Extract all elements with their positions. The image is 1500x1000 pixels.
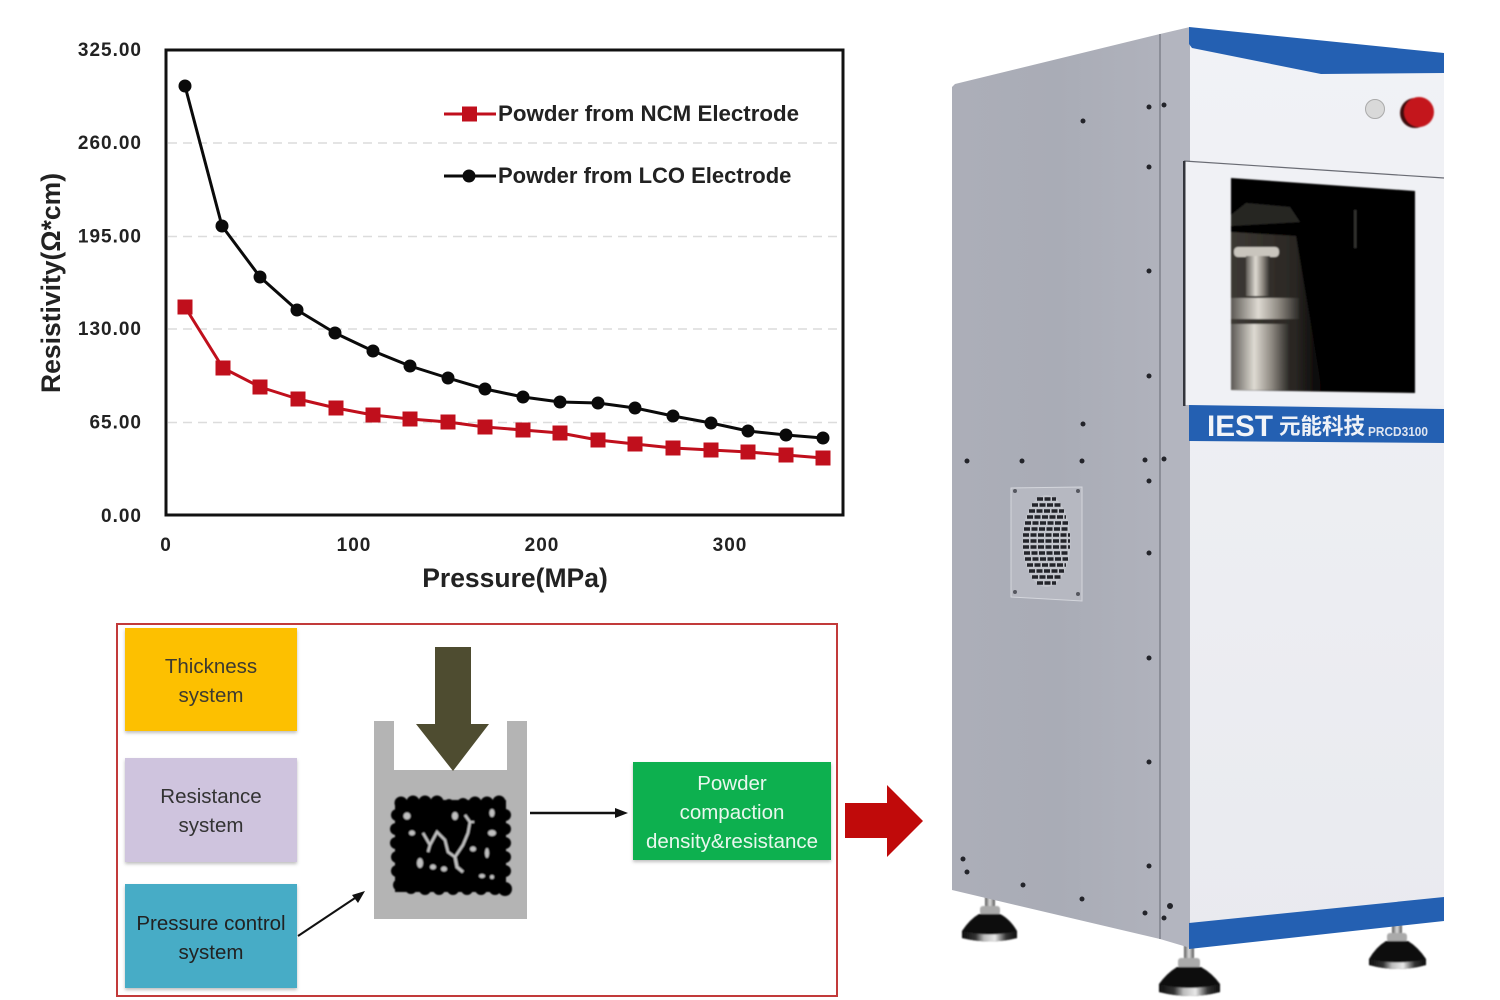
die with compacted powder bbox=[374, 721, 527, 919]
box: resistance system: Resistance bbox=[160, 785, 262, 808]
box: powder compaction density and resistance: compaction bbox=[680, 801, 784, 824]
x axis title: Pressure(MPa) bbox=[422, 563, 608, 593]
x axis tick labels: 300 bbox=[713, 535, 747, 556]
arrow: pressure control to die bbox=[298, 891, 365, 936]
y axis tick labels: 260.00 bbox=[78, 133, 142, 154]
box: thickness system bbox=[125, 628, 297, 731]
x axis tick labels: 100 bbox=[337, 535, 371, 556]
arrow: die to result bbox=[530, 808, 628, 818]
side panel bbox=[952, 34, 1160, 939]
front panel bbox=[1190, 27, 1444, 948]
series: NCM electrode powder bbox=[178, 300, 830, 466]
top blue stripe bbox=[1189, 27, 1444, 74]
line chart: resistivity vs pressure bbox=[36, 40, 843, 593]
internal mechanism bbox=[1231, 210, 1356, 390]
arrow: red arrow to instrument bbox=[845, 785, 923, 857]
arrow: press force bbox=[416, 647, 489, 771]
box: resistance system bbox=[125, 758, 297, 862]
window door frame bbox=[1183, 161, 1444, 406]
instrument: PRCD3100 powder tester bbox=[952, 27, 1444, 996]
box: thickness system: Thickness bbox=[165, 655, 257, 678]
indicator light bbox=[1366, 100, 1384, 118]
powder particles bbox=[390, 796, 512, 896]
y axis tick labels bbox=[78, 40, 142, 527]
box: powder compaction density and resistance: Powder bbox=[697, 772, 767, 795]
x axis tick labels: 200 bbox=[525, 535, 559, 556]
emergency stop button bbox=[1400, 97, 1434, 128]
side panel screws bbox=[960, 102, 1173, 920]
brand stripe: IEST bbox=[1207, 410, 1273, 443]
brand stripe: 元能科技 bbox=[1279, 414, 1365, 439]
bottom blue stripe bbox=[1189, 897, 1444, 949]
box: powder compaction density and resistance: density&resistance bbox=[646, 830, 818, 853]
y axis title: Resistivity(Ω*cm) bbox=[36, 173, 66, 393]
x axis tick labels bbox=[160, 535, 747, 556]
y axis tick labels: 65.00 bbox=[89, 412, 142, 434]
legend bbox=[444, 101, 799, 188]
y axis tick labels: 195.00 bbox=[78, 226, 142, 248]
series: LCO electrode powder bbox=[178, 80, 830, 444]
brand stripe: PRCD3100 bbox=[1368, 424, 1428, 439]
x axis tick labels: 0 bbox=[160, 535, 172, 556]
brand stripe bbox=[1189, 405, 1444, 443]
legend: Powder from LCO Electrode bbox=[498, 163, 791, 188]
viewing window bbox=[1231, 178, 1415, 393]
y axis tick labels: 130.00 bbox=[78, 319, 142, 340]
box: thickness system: system bbox=[179, 684, 243, 707]
leveling feet bbox=[962, 896, 1426, 996]
vent grille bbox=[1011, 487, 1082, 601]
box: pressure control system bbox=[125, 884, 297, 988]
box: powder compaction density and resistance bbox=[633, 762, 831, 860]
y axis tick labels: 325.00 bbox=[78, 40, 142, 61]
y axis tick labels: 0.00 bbox=[101, 506, 142, 527]
box: pressure control system: Pressure control bbox=[136, 912, 286, 935]
panel: powder compaction test schematic bbox=[117, 624, 837, 996]
plot frame bbox=[166, 50, 843, 515]
legend: Powder from NCM Electrode bbox=[498, 101, 799, 126]
box: resistance system: system bbox=[179, 814, 243, 837]
box: pressure control system: system bbox=[179, 941, 243, 964]
